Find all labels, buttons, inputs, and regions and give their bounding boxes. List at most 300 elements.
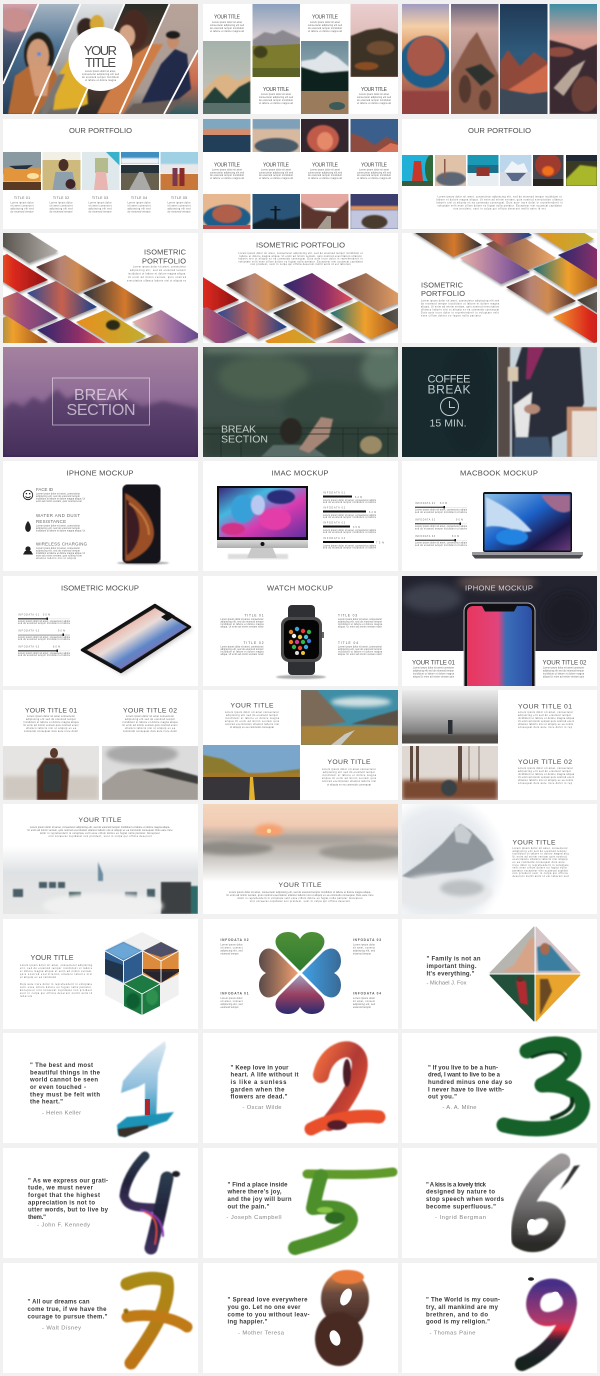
quote: and the joy will burn [228,1197,292,1203]
text: your title: Excepteur sint occaecat cupidatat non proident [20,989,92,992]
text: your title top [225,702,280,729]
slide: isometric mockup [3,576,198,686]
apple watch [276,605,326,679]
text: title 03 [338,614,383,628]
text: title 04: aliqua. Ut enim ad minim veniam nostr [338,653,382,656]
quote: try, all mankind are my [426,1305,499,1311]
icon: clock [440,398,458,416]
businessman in suit [498,347,597,457]
quote [426,1182,505,1221]
text: column titles: ut labore et dolore magna ali [210,177,244,180]
quote: - Thomas Paine [430,1330,476,1336]
isometric photo tiles [412,209,600,343]
quote: " All our dreams can [28,1300,90,1306]
title and text: Ut enim ad minim veniam, quis nostrud [128,276,187,279]
quote [428,1065,512,1111]
text: column titles: YOUR TITLE [263,162,290,168]
info bars: INFODATA 04 [323,537,346,540]
info sliders: 90% [58,630,65,632]
slide: iphone mockup features [3,461,198,571]
title circle: consectetur adipiscing elit sed [82,73,120,76]
text: your title 01: incididunt ut labore et dolore magna aliqua [24,721,79,724]
photo: figure in fog [402,690,498,744]
diamond: family at sunset [536,975,580,1021]
info sliders: INFODATA 03 [18,646,40,648]
text: column titles: YOUR TITLE [361,162,388,168]
text: column titles: consectetur adipiscing elit sed [357,172,392,174]
heading and text [238,240,363,266]
slide: quote one [3,1033,198,1143]
text block: column 1: Lorem ipsum dolor sit amet [212,21,242,24]
text: your title 02: incididunt ut labore et dolore magna [543,672,585,676]
text: column titles: do eiusmod tempor incididunt [308,174,342,177]
quote [28,1178,109,1228]
text: your title: sint occaecat cupidatat non proident, sunt in culpa qui officia deserunt [48,835,152,838]
heading: OUR PORTFOLIO [468,126,531,135]
info bars: sed do eiusmod tempor incididunt ut labore [323,531,377,534]
text block: column 3: consectetur adipiscing elit sed [308,24,343,27]
info bars [323,492,384,550]
text: your title 02: incididunt ut labore et dolore magna aliqua [122,721,178,724]
quote: - A. A. Milne [442,1105,476,1111]
text: title 03: TITLE 03 [92,196,108,200]
text: column titles: ut labore et dolore magna ali [308,177,342,180]
text: your title: laborum [20,995,32,998]
text: title 04: Lorem ipsum dolor sit amet, consectetur [338,646,382,648]
heading: OUR PORTFOLIO [69,126,132,135]
text: your title: ex ea commodo consequat duis aute [512,861,565,864]
text: title 04: Lorem ipsum dolor [128,202,151,204]
quote: brethren, and to do [426,1312,488,1318]
number 4 brush [124,1156,180,1248]
heading and text: non proident, sunt in culpa qui officia deserunt mollit anim id est laborum [250,263,351,266]
text: title 01: do eiusmod tempor [10,210,34,214]
feature: wireless charging: WIRELESS CHARGING [36,542,88,546]
number 2 brush [311,1049,379,1130]
info bars: sed do eiusmod tempor incididunt ut labore [323,516,377,519]
text: your title 01: adipiscing elit sed do eiusmod tempor [413,670,454,672]
slide: our portfolio five photos [3,119,198,229]
text: title 01: TITLE 01 [14,196,30,200]
quote: dred, I want to live to be a [428,1073,501,1079]
text: your title 02 [518,759,575,785]
photo: balloon [533,155,564,186]
photo: river canyon [550,4,597,114]
number 1 brush [117,1041,174,1137]
portrait details [0,8,191,114]
text: your title: incididunt ut labore et dolore magna aliq [512,853,569,856]
text: title 04: adipiscing elit sed [128,208,151,210]
text: your title top: Lorem ipsum dolor sit amet consectetur [225,711,279,714]
heart: orange [259,949,298,997]
dark panel [402,347,497,457]
title and text: ISOMETRIC [144,248,187,256]
info sliders: INFODATA 02 [18,630,40,632]
text: title 02: incididunt ut labore et dolore magna [220,650,264,654]
person with feet on railing [261,417,382,457]
text: your title 02 [542,660,587,678]
text: title 01: Lorem ipsum dolor sit amet, consectetur [220,618,264,621]
text block: column 1: consectetur adipiscing elit sed [210,24,245,27]
text: your title 01: Lorem ipsum dolor sit amet, consectetur [518,711,573,714]
quote: " If you live to be a hun- [428,1065,498,1071]
text: your title: YOUR TITLE [278,882,322,889]
text: your title bottom: Lorem ipsum dolor sit amet consectetur [322,768,376,771]
title and text [127,248,187,282]
text: infodata 03 [353,938,381,956]
text: column titles: consectetur adipiscing elit sed [210,172,245,174]
feature: wireless charging: ullamco laboris nisi ut aliquip [36,557,77,560]
text: your title: dolor in reprehenderit in voluptate velit esse cillum dolore eu fugiat nulla pariatur. Excepteur [238,897,363,900]
text: title 01 [10,196,34,214]
text: your title 01: commodo consequat duis aute irure dolor [24,730,78,733]
quote: come true, if we have the [28,1307,107,1313]
info sliders: sed do eiusmod tempor incididunt ut labore [415,544,468,547]
quote: good is my religion." [426,1320,490,1326]
text: title 01: Lorem ipsum dolor [10,202,34,204]
text: infodata 03: eiusmod tempor [353,952,371,956]
cube: blue mountain [105,942,142,983]
isometric photo tiles [169,273,451,371]
text: your title 02: consequat duis aute irure dolor in rep [518,782,573,785]
title circle: do eiusmod tempor incididunt [82,76,119,79]
heading and text: voluptate velit esse cillum dolore eu fugiat nulla pariatur. Excepteur sint occaecat cupidatat [239,260,363,263]
heading: IPHONE MOCKUP [66,469,134,478]
text: infodata 02: INFODATA 02 [220,938,249,942]
text block: column 4: YOUR TITLE [361,87,388,93]
text: your title 01: ullamco laboris nisi ut aliquip ex ea comm [518,723,573,726]
quote: them." [28,1215,46,1221]
slide: quote nine [402,1263,597,1373]
diamond: couple [536,927,580,973]
text: column titles: Lorem ipsum dolor sit amet [359,168,389,172]
heading and text: labore et dolore magna aliqua. Ut enim ad minim veniam, quis nostrud exercitation ullamco [239,255,362,258]
slide: quote seven [3,1263,198,1373]
slide: isometric portfolio top text [203,233,398,343]
slide: foggy photos with right titles [402,690,597,800]
info bars: Lorem ipsum dolor sit amet, consectetur adipis [323,514,377,517]
text: your title: YOUR TITLE [78,817,122,824]
text: column titles: YOUR TITLE [312,162,339,168]
heart: blue [302,949,341,997]
text block: non proident, sunt in culpa qui officia deserunt mollit anim id est [454,208,546,210]
text: infodata 03: adipiscing elit, sed [353,950,376,952]
info sliders: Lorem ipsum dolor sit amet, consectetur adipis [18,652,71,655]
photo: snowy peak fading to white [392,804,507,914]
text: your title 02: Lorem ipsum dolor sit amet consectet [543,666,584,670]
text: your title top: incididunt ut labore et dolore magna [225,717,280,720]
slide: quote family diamond [402,919,597,1029]
text block: voluptate velit esse cillum dolore eu fugiat nulla pariatur. Excepteur sint occaecat cupidatat [438,204,562,208]
info sliders: INFODATA 03 [415,535,436,538]
text: title 02: adipiscing elit, sed do eiusmod tempor [220,648,264,651]
text: title 03: Lorem ipsum dolor [88,202,112,204]
text: title 02: Lorem ipsum dolor [50,202,73,204]
text: your title: irure dolor in reprehenderit in voluptate [512,864,569,867]
quote: - Joseph Campbell [226,1215,282,1221]
text: title 03: adipiscing elit sed [88,208,112,210]
text: your title: sint occaecat cupidatat non proident, sunt in culpa qui officia deserunt [250,900,350,903]
info sliders: Lorem ipsum dolor sit amet, consectetur adipis [415,542,468,544]
photo: sand peak [203,41,250,114]
heading: WATCH MOCKUP [267,584,333,593]
slide: quote six [402,1148,597,1258]
slide: our portfolio six photos [402,119,597,229]
isometric iphone [82,605,193,675]
quote: the heart." [30,1100,63,1106]
text: column titles: do eiusmod tempor incididunt [210,174,244,177]
photo: snowy hill [102,744,198,800]
photo: mountain road [121,152,159,190]
text: infodata 04: INFODATA 04 [353,992,381,996]
text: your title 01: ullamco laboris nisi ut aliquip ex ea [26,727,77,730]
text: infodata 04 [353,992,381,1009]
iphone with planet wallpaper [117,484,169,565]
heading: COFFEE [428,374,470,386]
text block: column 3: YOUR TITLE [312,14,339,20]
quote: - Oscar Wilde [242,1105,282,1111]
quote: garden when the [230,1087,285,1093]
heading: ISOMETRIC MOCKUP [61,584,139,593]
text: title 04: incididunt ut labore et dolore magna [338,650,383,654]
title and text: exercitation ullamco laboris nisi ut aliquip ex [127,280,187,282]
title and text: PORTFOLIO [142,256,186,266]
text: infodata 03: sit amet, consect [353,946,375,950]
info sliders: Lorem ipsum dolor sit amet, consectetur adipis [415,508,468,512]
text: your title 02: YOUR TITLE 02 [123,708,177,715]
quote: flowers are dead." [230,1095,288,1101]
quote: " The best and most [30,1063,93,1069]
text block: column 3: ut labore et dolore magna ali [308,30,342,33]
heading: BREAK [221,424,256,436]
title and text: Lorem ipsum dolor sit amet, consectetur adipiscing elit sed [421,300,500,302]
photo: stargazer [252,194,300,229]
forest silhouette [3,389,198,457]
info sliders: sed do eiusmod tempor incididunt ut labore [18,638,71,641]
quote: utter words, but to live by [28,1208,109,1214]
slide: four photos with text columns [203,4,398,114]
diamond: hands [490,927,534,973]
text block: column 4: Lorem ipsum dolor sit amet [359,93,389,96]
info sliders: sed do eiusmod tempor incididunt ut labore [415,528,468,530]
text block: column 4 [357,87,392,105]
photo: cave [301,119,348,152]
text block: column 4: consectetur adipiscing elit sed [357,96,392,99]
text: infodata 02: eiusmod tempor [220,952,239,956]
photo: sunrise clouds [193,804,407,882]
title and text: PORTFOLIO [421,289,465,298]
text: title 01: aliqua. Ut enim ad minim veniam nostr [220,626,264,628]
text: title 02: TITLE 02 [53,196,69,200]
number 5 brush [295,1172,393,1248]
title and text: do eiusmod tempor incididunt ut labore et dolore magna [421,302,500,306]
text: column titles: consectetur adipiscing elit sed [259,172,294,174]
title circle: YOUR [84,43,117,58]
quote: where there's joy, [226,1190,282,1196]
text: your title 02: ullamco laboris nisi ut aliquip ex ea comm [518,779,573,782]
text: infodata 03: INFODATA 03 [353,938,381,942]
text: your title 02: adipiscing elit sed do eiusmod tempor [543,670,584,672]
feature: water resistance [25,513,85,532]
photo: horseshoe bend [402,4,449,114]
title circle: ut labore et dolore magna [85,79,117,82]
text: your title 01: adipiscing elit sed do eiusmod tempor [518,714,571,717]
text: title 03: sit amet consectet [88,204,112,208]
photo: valley dusk [203,119,250,152]
quote: I never have to live with- [428,1087,504,1093]
text: your title 02: YOUR TITLE 02 [518,759,572,766]
photo: red cabin [468,155,498,186]
title circle: TITLE [85,55,116,70]
slide: your title diagonal portraits [3,4,198,114]
photo: starry red hills [500,4,548,114]
quote [426,956,481,986]
white diagonal separators [3,4,198,114]
info sliders: sed do eiusmod tempor incididunt ut labore [18,654,71,657]
text: your title 02: adipiscing elit sed do eiusmod tempor [125,718,175,721]
feature: wireless charging: Lorem ipsum dolor sit amet, consectetur [36,547,80,550]
heading [66,387,136,419]
text: column titles: Lorem ipsum dolor sit amet [310,168,340,172]
quote: or even touched - [30,1085,86,1091]
info bars: Lorem ipsum dolor sit amet, consectetur adipis [323,544,377,548]
slide: two photos under two titles [3,690,198,800]
text: your title: velit esse cillum dolore eu fugiat nulla [512,867,567,870]
text: title 04: adipiscing elit, sed do eiusmod tempor [338,648,382,651]
text: your title top: adipiscing elit sed do eiusmod tempor [226,714,278,717]
text: title 03: adipiscing elit, sed do eiusmod tempor [338,620,382,624]
slide: isometric portfolio right text [3,233,198,343]
info sliders: Lorem ipsum dolor sit amet, consectetur adipis [415,525,468,528]
info sliders: 80% [452,536,459,538]
text: your title 01: YOUR TITLE 01 [412,660,456,666]
text: your title 01: Ut enim ad minim veniam quis nostrud exerc [24,724,79,727]
heading: 15 MIN. [430,418,466,430]
text: title 02: aliqua. Ut enim ad minim veniam nostr [220,653,264,656]
slide: macbook mockup [402,461,597,571]
photo: airplane sunset [3,152,41,190]
quote: hundred minus one day so [428,1080,512,1086]
text: your title [226,882,374,903]
foliage blurs [203,347,405,457]
photo: night canyon [350,119,398,152]
text: title 04 [338,641,383,656]
title and text: Duis aute irure dolor in reprehenderit in voluptate velit [421,312,499,314]
text: your title 01: Ut enim ad minim veniam quis nostrud exerc [518,720,575,723]
text: your title top: aliqua Ut enim ad minim veniam quis [225,720,280,723]
photo: mountain path [301,690,398,745]
feature: face id: Lorem ipsum dolor sit amet, consectetur [36,492,80,496]
text block: column 3 [308,14,343,33]
quote: " The World is my coun- [426,1298,500,1304]
cube: green leaves [124,975,160,1015]
text: your title: Ut enim ad minim veniam, quis nostrud exercitation ullamco laboris nisi ut aliquip ex ea commodo consequat. Duis aute irure [28,829,173,832]
quote: designed by nature to [426,1190,495,1196]
slide: hexagon cubes [3,919,198,1029]
text frame [52,378,150,425]
quote: they must be felt with [30,1092,100,1098]
text: title 05: sit amet consectet [168,204,191,208]
heading: MACBOOK MOCKUP [460,469,538,478]
title and text: adipiscing elit, sed do eiusmod tempor [130,269,186,272]
title and text [421,280,500,318]
text: your title 01: incididunt ut labore et dolore magna [413,672,455,676]
info sliders: 90% [456,520,463,522]
heading and text: Lorem ipsum dolor sit amet, consectetur adipiscing elit, sed do eiusmod tempor incididunt ut [239,252,363,255]
text: column titles: ut labore et dolore magna ali [259,177,293,180]
text: title 02: TITLE 02 [244,641,264,645]
info bars: 82% [369,512,376,514]
text block: column 2: YOUR TITLE [263,87,290,93]
info sliders: 60% [440,503,447,505]
quote: courage to pursue them." [28,1314,108,1320]
number 8 brush [315,1270,369,1366]
quote: - Mother Teresa [238,1330,285,1336]
text: your title 01: YOUR TITLE 01 [518,704,572,710]
text: infodata 01: INFODATA 01 [220,992,249,996]
text: your title: dolor in reprehenderit in voluptate velit esse cillum dolore eu fugiat nulla pariatur. Excepteur [40,832,160,835]
text: title 01: adipiscing elit sed [10,208,34,210]
text: your title 02: adipiscing elit sed do eiusmod tempor [518,770,571,773]
number 7 brush [124,1278,187,1363]
photo: zion river [301,194,348,229]
text: your title bottom: YOUR TITLE [328,759,371,766]
slide: iphone mockup dark [402,574,597,698]
text: title 01: sit amet consectet [10,204,34,208]
text: your title: non proident sunt in culpa qui officia [512,872,568,875]
slide: break section purple forest [3,347,198,457]
number 6 brush [520,1162,580,1244]
quote: " Spread love everywhere [228,1298,308,1304]
slide: watch mockup [203,576,398,686]
photo: woman with sunglasses [42,152,80,190]
info sliders: INFODATA 01 [415,502,436,505]
text: infodata 01: Lorem ipsum dolor [220,997,243,1000]
quote [29,1063,101,1116]
text: infodata 04: sit amet, consect [353,1000,375,1003]
text: your title bottom: nostrud exercitation ullamco laboris nisi [322,780,376,783]
text: title 04: TITLE 04 [338,641,358,645]
heading [428,374,470,430]
text: infodata 04: Lorem ipsum dolor [353,997,375,1000]
title and text: aliqua. Ut enim ad minim veniam, quis nostrud exercitation [421,306,500,308]
slide: four vertical canyon photos [402,4,597,114]
text: your title 02: commodo consequat duis aute irure dolor [123,730,177,733]
photo: dusk ridge [350,4,398,77]
text: your title: Lorem ipsum dolor sit amet, consectetur adipiscing [20,964,93,967]
text: your title 01: incididunt ut labore et dolore magna aliqua [518,717,575,720]
info sliders: 50% [43,614,50,616]
quote: you go. Let no one ever [228,1305,301,1311]
cube: orange sunset [143,942,179,983]
text: your title 01: YOUR TITLE 01 [25,708,77,715]
text: your title: elit, sed do eiusmod tempor incididunt ut labore [20,967,93,970]
photo: pagoda [402,155,433,186]
title and text: Lorem ipsum dolor sit amet, consectetur [133,266,186,268]
text: title 05: do eiusmod tempor [168,210,191,214]
quote [426,1298,500,1336]
text: infodata 02: sit amet, consect [220,946,243,950]
text: column titles: ut labore et dolore magna ali [357,177,391,180]
quote: out you." [428,1095,457,1101]
text: infodata 03: Lorem ipsum dolor [353,944,375,946]
title and text: ISOMETRIC [421,280,464,290]
text: your title 02: incididunt ut labore et dolore magna aliqua [518,773,575,776]
tree on yellow tile [106,320,120,330]
quote [230,1065,298,1111]
quote: important thing. [426,964,477,970]
text block: column 2 [259,87,294,105]
